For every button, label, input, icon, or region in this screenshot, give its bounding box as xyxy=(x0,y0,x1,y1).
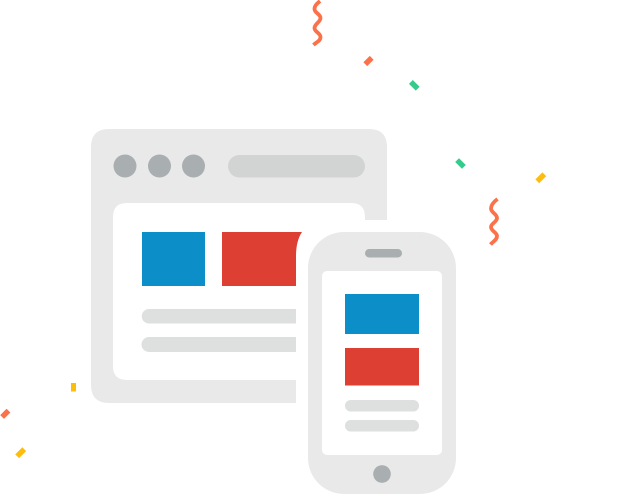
browser blue block xyxy=(142,232,205,286)
phone body xyxy=(308,232,456,494)
confetti piece orange top xyxy=(363,56,374,66)
confetti piece yellow left xyxy=(71,383,76,392)
phone xyxy=(308,232,456,494)
browser window xyxy=(91,129,387,403)
squiggle right xyxy=(490,199,498,244)
phone home button xyxy=(373,465,391,483)
squiggle top xyxy=(314,1,320,45)
confetti piece orange left xyxy=(0,409,10,419)
confetti piece green top xyxy=(409,80,420,91)
confetti piece green right xyxy=(455,158,466,169)
phone screen xyxy=(322,271,442,455)
confetti piece yellow bottom xyxy=(15,447,26,458)
phone speaker xyxy=(365,249,402,258)
phone text lines xyxy=(345,400,419,432)
phone blue block xyxy=(345,294,419,334)
browser text lines xyxy=(142,309,296,352)
browser content panel xyxy=(113,203,365,380)
browser frame xyxy=(91,129,387,403)
browser red block xyxy=(222,232,302,286)
phone red block xyxy=(345,348,419,386)
browser control dots xyxy=(114,154,205,178)
address bar xyxy=(228,155,365,178)
confetti piece yellow right xyxy=(535,172,546,183)
